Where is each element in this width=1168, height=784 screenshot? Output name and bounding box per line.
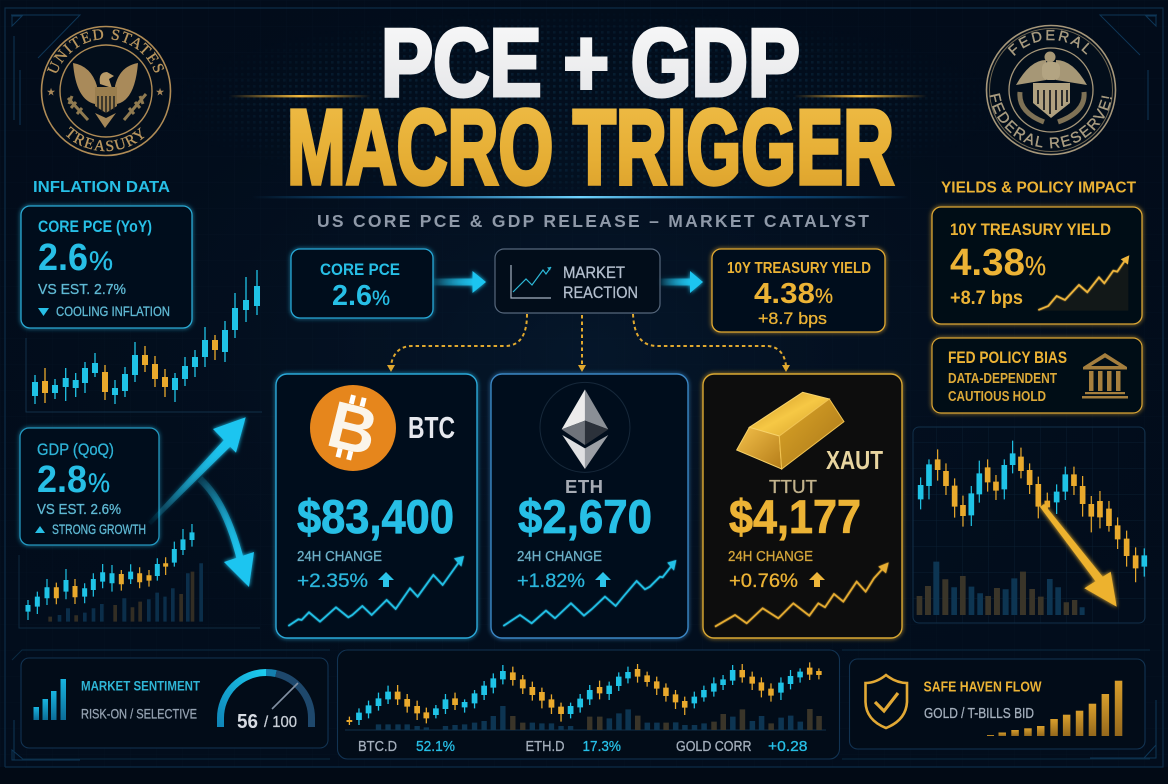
candles: [349, 665, 590, 725]
seal: United States Treasury: [40, 26, 172, 156]
panel: ETH card: [491, 374, 688, 638]
panel: core PCE YoY: %: [89, 246, 113, 276]
panel: core PCE YoY: 2.6: [38, 237, 88, 279]
panel: BTC card: $83,400: [297, 490, 454, 543]
panel: dominance chart: ETH.D: [526, 738, 565, 755]
bar chart: flow: [987, 681, 1122, 736]
panel: market sentiment: 56: [237, 711, 258, 733]
flow box: market reaction: MARKET: [563, 264, 625, 282]
flow box: core PCE: 2.6: [332, 280, 372, 312]
panel: Fed policy bias: CAUTIOUS HOLD: [948, 389, 1046, 405]
icon: up arrow: [809, 572, 825, 587]
panel: 10Y treasury yield: 10Y TREASURY YIELD: [950, 220, 1111, 239]
panel: XAUT card: 24H CHANGE: [728, 549, 813, 565]
volume bars: [376, 706, 822, 730]
panel: 10Y treasury yield: +8.7 bps: [950, 288, 1023, 309]
seal: Federal Reserve: [986, 24, 1116, 156]
panel: XAUT card: +0.76%: [729, 571, 798, 592]
title line 1: PCE + GDP: [381, 10, 800, 116]
panel: Fed policy bias: [932, 338, 1142, 413]
sparkline: yield: [1038, 255, 1129, 311]
icon: up arrow: [378, 572, 394, 587]
panel: XAUT card: [703, 374, 902, 638]
icon: shield check: [866, 675, 907, 728]
panel: dominance chart: [338, 650, 840, 759]
panel: safe haven flow: GOLD / T-BILLS BID: [924, 706, 1034, 722]
flow box: 10Y treasury yield: 10Y TREASURY YIELD: [727, 260, 871, 277]
seal: Federal Reserve: FEDERAL RESERVE!: [990, 93, 1112, 148]
seal: Federal Reserve: FEDERAL: [1008, 30, 1090, 56]
panel: core PCE YoY: COOLING INFLATION: [56, 304, 170, 319]
flow box: core PCE: %: [372, 287, 390, 310]
stat labels: BTC.D: [358, 738, 397, 755]
chart: right candlesticks falling: [913, 427, 1145, 623]
arrow: market reaction to yield: [661, 271, 703, 293]
panel: core PCE YoY: CORE PCE (YoY): [38, 218, 152, 236]
panel: 10Y treasury yield: 4.38: [950, 242, 1025, 284]
sparkline: ETH: [503, 560, 676, 626]
panel: market sentiment: / 100: [264, 714, 297, 731]
icon: bitcoin: B: [321, 386, 385, 470]
panel: XAUT card: TTUT: [769, 476, 817, 497]
panel: dominance chart: 52.1%: [416, 738, 455, 755]
flow box: market reaction: [495, 249, 660, 313]
subtitle: US CORE PCE & GDP RELEASE – MARKET CATALYST: [317, 211, 869, 231]
panel: 10Y treasury yield: %: [1025, 251, 1046, 281]
panel: XAUT card: $4,177: [729, 490, 861, 543]
seal: United States Treasury: TREASURY: [66, 126, 144, 152]
panel: dominance chart: GOLD CORR: [676, 738, 752, 755]
panel: ETH card: $2,670: [518, 490, 652, 543]
panel: BTC card: 24H CHANGE: [297, 549, 382, 565]
panel: GDP QoQ: STRONG GROWTH: [52, 522, 146, 537]
panel: ETH card: 24H CHANGE: [517, 549, 602, 565]
panel: safe haven flow: [850, 659, 1145, 749]
chart: left lower candlesticks: [19, 524, 260, 628]
panel: dominance chart: 17.3%: [582, 738, 621, 755]
arrow: GDP down: [200, 479, 254, 587]
panel: market sentiment: [21, 658, 328, 748]
flow box: core PCE: CORE PCE: [320, 260, 400, 279]
seal: United States Treasury: UNITED STATES: [46, 29, 164, 73]
panel: core PCE YoY: VS EST. 2.7%: [38, 281, 126, 298]
panel: Fed policy bias: DATA-DEPENDENT: [948, 371, 1057, 387]
sparkline: BTC: [288, 556, 464, 626]
chart: left upper candlesticks: [26, 270, 262, 412]
icon: bank building: [1082, 353, 1128, 398]
panel: GDP QoQ: GDP (QoQ): [37, 441, 114, 459]
panel: dominance chart: +0.28: [768, 738, 808, 755]
icon: bars: [34, 679, 66, 720]
panel: Fed policy bias: FED POLICY BIAS: [948, 349, 1067, 367]
panel: core PCE YoY: [21, 206, 192, 328]
flow box: market reaction: REACTION: [563, 284, 638, 302]
panel: ETH card: +1.82%: [517, 571, 585, 592]
right heading: yields and policy impact: YIELDS & POLICY IMPACT: [941, 180, 1136, 196]
panel: GDP QoQ: VS EST. 2.6%: [37, 501, 121, 518]
flow box: 10Y treasury yield: [712, 249, 885, 332]
panel: GDP QoQ: 2.8: [37, 459, 87, 501]
panel: XAUT card: XAUT: [826, 445, 883, 475]
arrows: dashed flow to assets: [387, 314, 790, 372]
icon: gold bar: [737, 392, 844, 469]
arrow: GDP up: [148, 417, 246, 525]
panel: GDP QoQ: %: [88, 468, 110, 498]
icon: up arrow: [595, 572, 611, 587]
left heading: inflation data: INFLATION DATA: [33, 179, 170, 196]
title: [287, 10, 894, 206]
flow box: 10Y treasury yield: 4.38: [754, 278, 815, 310]
panel: safe haven flow: SAFE HAVEN FLOW: [924, 678, 1042, 696]
panel: BTC card: +2.35%: [297, 571, 368, 592]
panel: market sentiment: MARKET SENTIMENT: [81, 678, 200, 694]
panel: GDP QoQ: [20, 428, 159, 545]
sparkline: XAUT: [715, 562, 889, 627]
flow box: 10Y treasury yield: %: [815, 285, 833, 308]
flow box: 10Y treasury yield: +8.7 bps: [758, 309, 827, 328]
arrow: core PCE to market reaction: [434, 271, 486, 293]
panel: BTC card: [276, 374, 477, 638]
panel: ETH card: ETH: [565, 476, 603, 497]
panel: BTC card: BTC: [408, 410, 455, 445]
seal: United States Treasury: ★: [156, 87, 165, 97]
panel: 10Y treasury yield: [932, 207, 1142, 324]
icon: ethereum: [540, 382, 630, 472]
gauge: [220, 672, 312, 727]
flow box: core PCE: [291, 249, 433, 318]
panel: market sentiment: RISK-ON / SELECTIVE: [81, 706, 197, 722]
arrow: gold falling: [1040, 504, 1117, 607]
seal: United States Treasury: ★: [47, 87, 56, 97]
